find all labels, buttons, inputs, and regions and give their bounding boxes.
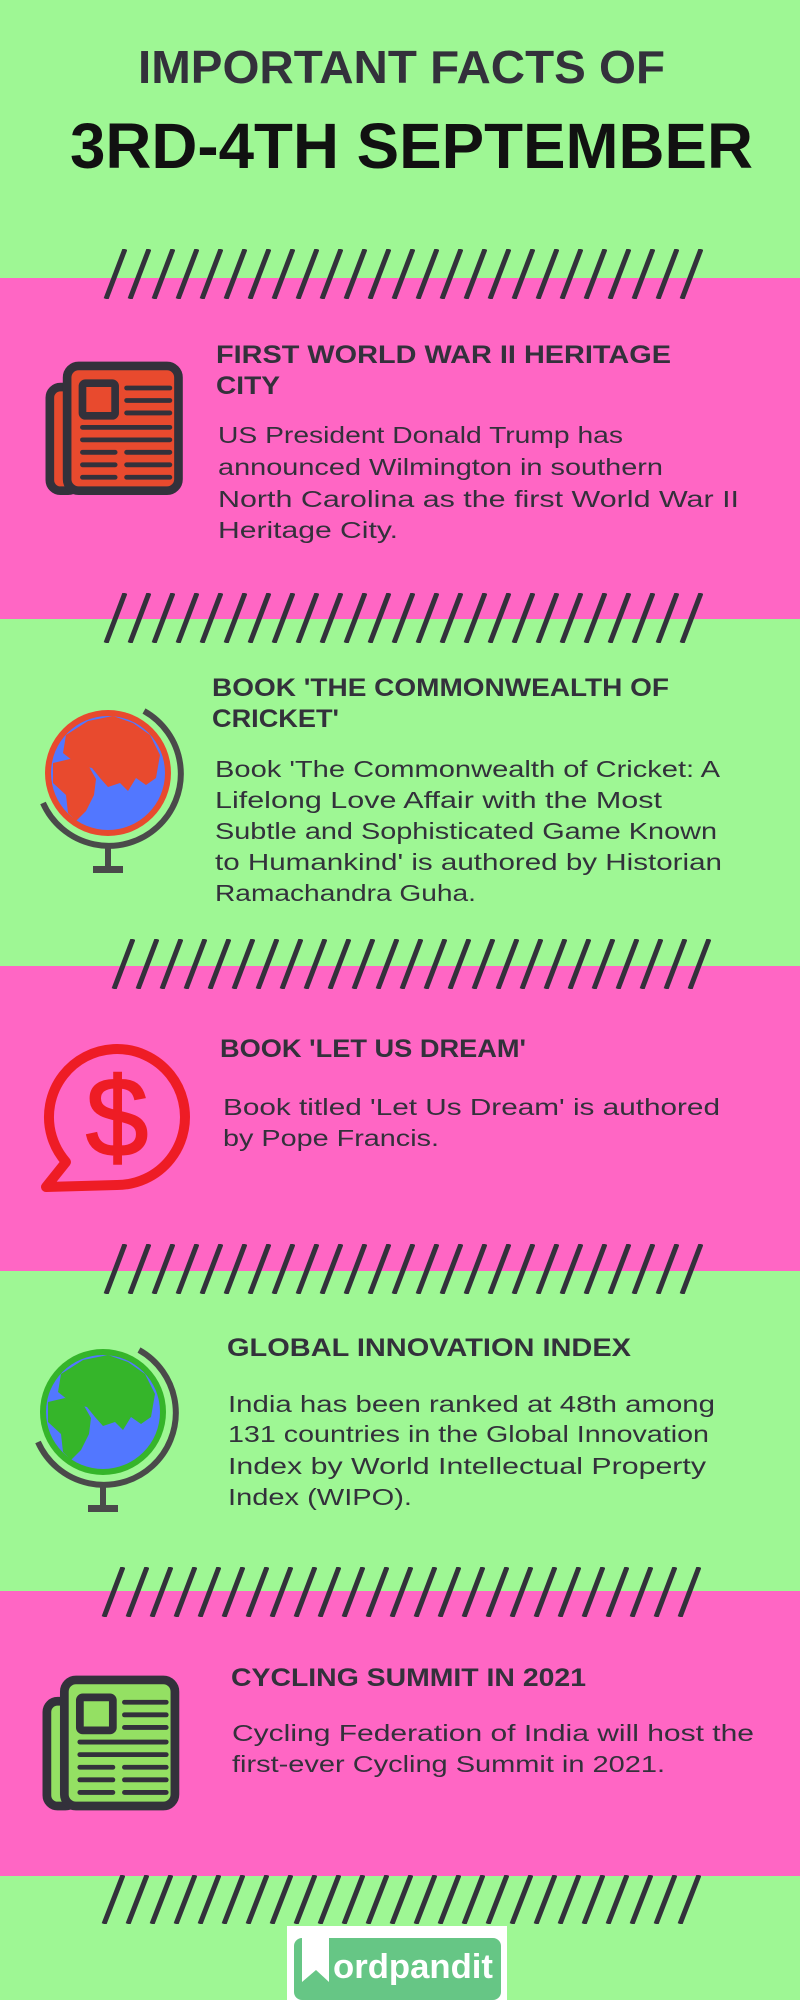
logo: wordpandit: ordpandit xyxy=(333,1948,493,1986)
text block xyxy=(215,756,722,906)
text block: Index by World Intellectual Property xyxy=(228,1453,707,1479)
text block: by Pope Francis. xyxy=(223,1125,439,1151)
heading: GLOBAL INNOVATION INDEX xyxy=(227,1334,631,1362)
heading xyxy=(216,341,671,400)
icon: newspaper orange xyxy=(50,366,178,491)
text block xyxy=(228,1391,715,1510)
heading: FIRST WORLD WAR II HERITAGE xyxy=(216,341,671,369)
text block: Book titled 'Let Us Dream' is authored xyxy=(223,1094,720,1120)
panel: global innovation index xyxy=(38,1334,715,1512)
icon: globe green xyxy=(38,1349,176,1512)
heading: CITY xyxy=(216,372,280,400)
heading: BOOK 'THE COMMONWEALTH OF xyxy=(212,674,669,702)
icon: newspaper green xyxy=(47,1680,175,1806)
text block: 131 countries in the Global Innovation xyxy=(228,1421,709,1447)
text block: Index (WIPO). xyxy=(228,1484,412,1510)
panel: commonwealth of cricket xyxy=(43,674,722,906)
panel: heritage city xyxy=(50,341,739,543)
text block xyxy=(232,1720,754,1777)
title: IMPORTANT FACTS OF xyxy=(138,41,665,93)
text block: announced Wilmington in southern xyxy=(218,454,663,480)
text block xyxy=(218,422,739,543)
title xyxy=(70,41,753,182)
logo: wordpandit xyxy=(287,1926,507,2000)
text block: Ramachandra Guha. xyxy=(215,880,476,906)
text block: Book 'The Commonwealth of Cricket: A xyxy=(215,756,721,782)
title: 3RD-4TH SEPTEMBER xyxy=(70,110,753,182)
heading: BOOK 'LET US DREAM' xyxy=(220,1035,526,1063)
heading: CYCLING SUMMIT IN 2021 xyxy=(231,1664,586,1692)
heading xyxy=(212,674,669,733)
panel: let us dream xyxy=(46,1035,720,1187)
icon: dollar speech bubble xyxy=(46,1049,185,1187)
heading: CRICKET' xyxy=(212,705,339,733)
text block: North Carolina as the first World War II xyxy=(218,486,739,512)
text block: Lifelong Love Affair with the Most xyxy=(215,787,663,813)
text block: to Humankind' is authored by Historian xyxy=(215,849,722,875)
text block: Heritage City. xyxy=(218,517,398,543)
panel: cycling summit xyxy=(47,1664,754,1806)
text block xyxy=(223,1094,720,1151)
text block: first-ever Cycling Summit in 2021. xyxy=(232,1751,665,1777)
text block: Cycling Federation of India will host the xyxy=(232,1720,754,1746)
text block: India has been ranked at 48th among xyxy=(228,1391,715,1417)
icon: globe orange xyxy=(43,710,181,873)
text block: US President Donald Trump has xyxy=(218,422,623,448)
icon: dollar speech bubble: $ xyxy=(86,1055,148,1180)
text block: Subtle and Sophisticated Game Known xyxy=(215,818,717,844)
